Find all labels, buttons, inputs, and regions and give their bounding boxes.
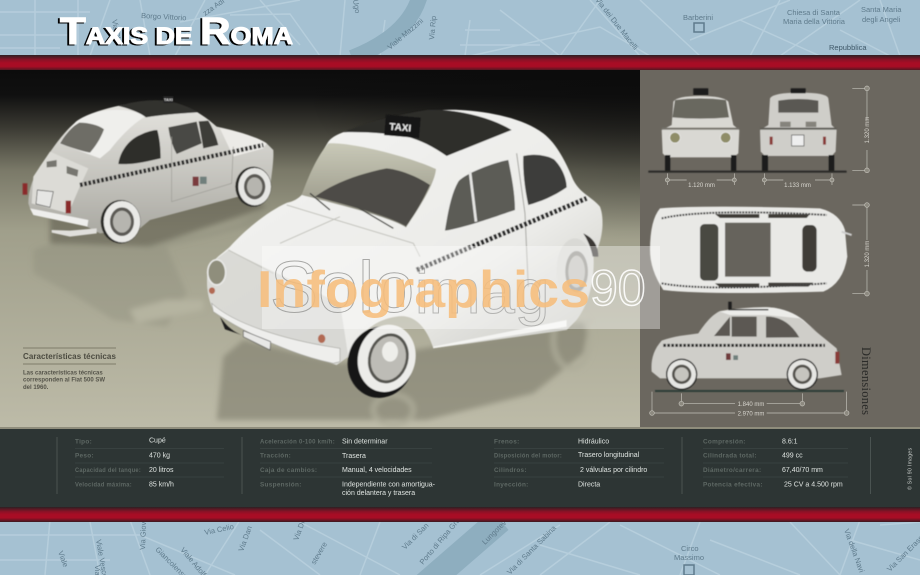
specs column 2 xyxy=(260,438,436,497)
specs column 3: Directa xyxy=(578,482,600,488)
panel: technical data xyxy=(0,427,920,508)
watermark: imag xyxy=(415,258,549,327)
specs column 1: 85 km/h xyxy=(149,482,174,488)
map background: bottom: Via Dan xyxy=(236,525,254,553)
specs column 1: Velocidad máxima: xyxy=(75,482,132,488)
map background: top: Chiesa di Santa xyxy=(787,8,841,17)
dimension lines xyxy=(650,86,869,415)
specs column 3: Frenos: xyxy=(494,438,520,446)
specs column 4: 25 CV a 4.500 rpm xyxy=(784,482,843,488)
map background: bottom: Massimo xyxy=(674,553,704,562)
specs column 2: Aceleración 0-100 km/h: xyxy=(260,438,335,446)
dimensions heading: Dimensiones xyxy=(859,347,873,415)
specs column 2: Tracción: xyxy=(260,452,291,460)
specs column 4: Cilindrada total: xyxy=(703,452,757,460)
specs column 3: Cilindros: xyxy=(494,467,527,474)
map background: bottom: Via della Navi xyxy=(842,528,866,574)
map background: top: Repubblica xyxy=(829,43,867,52)
specs column 4: 67,40/70 mm xyxy=(782,467,823,474)
specs column 3: Hidráulico xyxy=(578,438,609,446)
blueprint: front and rear views xyxy=(648,88,847,173)
specs column 1: 20 litros xyxy=(149,467,174,474)
specs column 2: Independiente con amortigua- xyxy=(342,482,436,488)
map background: top: degli Angeli xyxy=(862,15,901,24)
map background: bottom: stevere xyxy=(309,540,329,566)
map background: top: Via Pla xyxy=(110,19,123,44)
specs column 2: Caja de cambios: xyxy=(260,467,317,474)
watermark: 90 xyxy=(590,260,646,316)
watermark: Solo xyxy=(270,248,414,328)
specs column 3: Disposición del motor: xyxy=(494,452,562,460)
technical note: corresponden al Fiat 500 SW xyxy=(23,378,105,384)
map background: top: Borgo Vittorio xyxy=(141,11,187,22)
dimension labels xyxy=(688,117,871,418)
map background: bottom: Circo xyxy=(681,544,699,553)
specs column 1 xyxy=(75,438,174,488)
main front-view taxi xyxy=(207,110,603,405)
map background: bottom: Viale xyxy=(56,550,70,568)
top red band xyxy=(0,55,920,71)
specs column 4: 8.6:1 xyxy=(782,438,798,446)
photo panel xyxy=(0,70,640,428)
blueprint: side view xyxy=(651,302,844,392)
river, bottom xyxy=(425,520,500,575)
specs column 4: Compresión: xyxy=(703,438,746,446)
specs column 2: Suspensión: xyxy=(260,482,302,488)
specs column 1: Peso: xyxy=(75,452,94,460)
specs column 1: Capacidad del tanque: xyxy=(75,467,141,474)
technical note xyxy=(23,348,116,391)
map background: top xyxy=(0,0,920,58)
map background: bottom: Via di Santa Sabina xyxy=(505,523,558,575)
river, top xyxy=(352,0,420,58)
specs column 2: ción delantera y trasera xyxy=(342,490,415,497)
specs column 3: 2 válvulas por cilindro xyxy=(580,467,647,474)
dimension labels: 1.320 mm xyxy=(865,117,871,143)
panel: dimensions blueprints xyxy=(640,70,920,428)
map background: top: Barberini xyxy=(683,13,713,22)
map background: top: Santa Maria xyxy=(861,5,902,14)
technical note: Las características técnicas xyxy=(23,370,103,376)
technical note: Características técnicas xyxy=(23,352,116,361)
watermark xyxy=(257,246,660,329)
specs column 1: 470 kg xyxy=(149,452,170,460)
dimension labels: 1.320 mm xyxy=(865,241,871,267)
car reflections on floor xyxy=(33,193,590,425)
map background: top: Via Rip xyxy=(427,15,438,40)
small rear-view taxi: TAXI xyxy=(164,97,173,102)
map background: top: Viale Mazzini xyxy=(386,16,425,52)
specs column 3 xyxy=(494,438,647,488)
dimension labels: 1.840 mm xyxy=(738,402,764,408)
map background: bottom: Lungotev xyxy=(480,518,508,546)
small rear-view taxi xyxy=(23,96,273,243)
map background: bottom: Via Celio xyxy=(204,522,235,537)
specs column 2: Sin determinar xyxy=(342,438,388,446)
specs column 4: 499 cc xyxy=(782,452,803,460)
technical note: del 1960. xyxy=(23,385,49,391)
specs column 1: Tipo: xyxy=(75,438,92,446)
map background: bottom: Via di San xyxy=(400,521,431,551)
specs column 4: Potencia efectiva: xyxy=(703,482,763,488)
specs column 4 xyxy=(703,438,843,488)
specs column 3: Inyección: xyxy=(494,482,529,488)
copyright: © Sol 90 Images xyxy=(906,448,914,490)
specs column 2: Trasera xyxy=(342,453,366,460)
map background: bottom: Via Giovanni C xyxy=(138,499,149,550)
main front-view taxi: TAXI xyxy=(389,122,412,135)
title: TAXIS DE ROMA xyxy=(60,11,293,53)
map background: bottom xyxy=(0,499,920,575)
map background: top: Maria della Vittoria xyxy=(783,17,846,26)
specs column 2: Manual, 4 velocidades xyxy=(342,467,412,474)
dimension labels: 1.120 mm xyxy=(688,183,715,189)
map background: bottom: Via Di xyxy=(291,520,307,542)
dimension labels: 1.133 mm xyxy=(784,183,811,189)
specs column 1: Cupé xyxy=(149,438,166,444)
watermark: Infographics xyxy=(257,261,590,319)
map background: bottom: Porto di Ripa Grande xyxy=(418,507,470,566)
specs column 3: Trasero longitudinal xyxy=(578,452,640,459)
dimension labels: 2.970 mm xyxy=(738,412,764,418)
specs column 4: Diámetro/carrera: xyxy=(703,467,761,474)
blueprint: top view xyxy=(650,207,852,293)
bottom red band xyxy=(0,507,920,522)
